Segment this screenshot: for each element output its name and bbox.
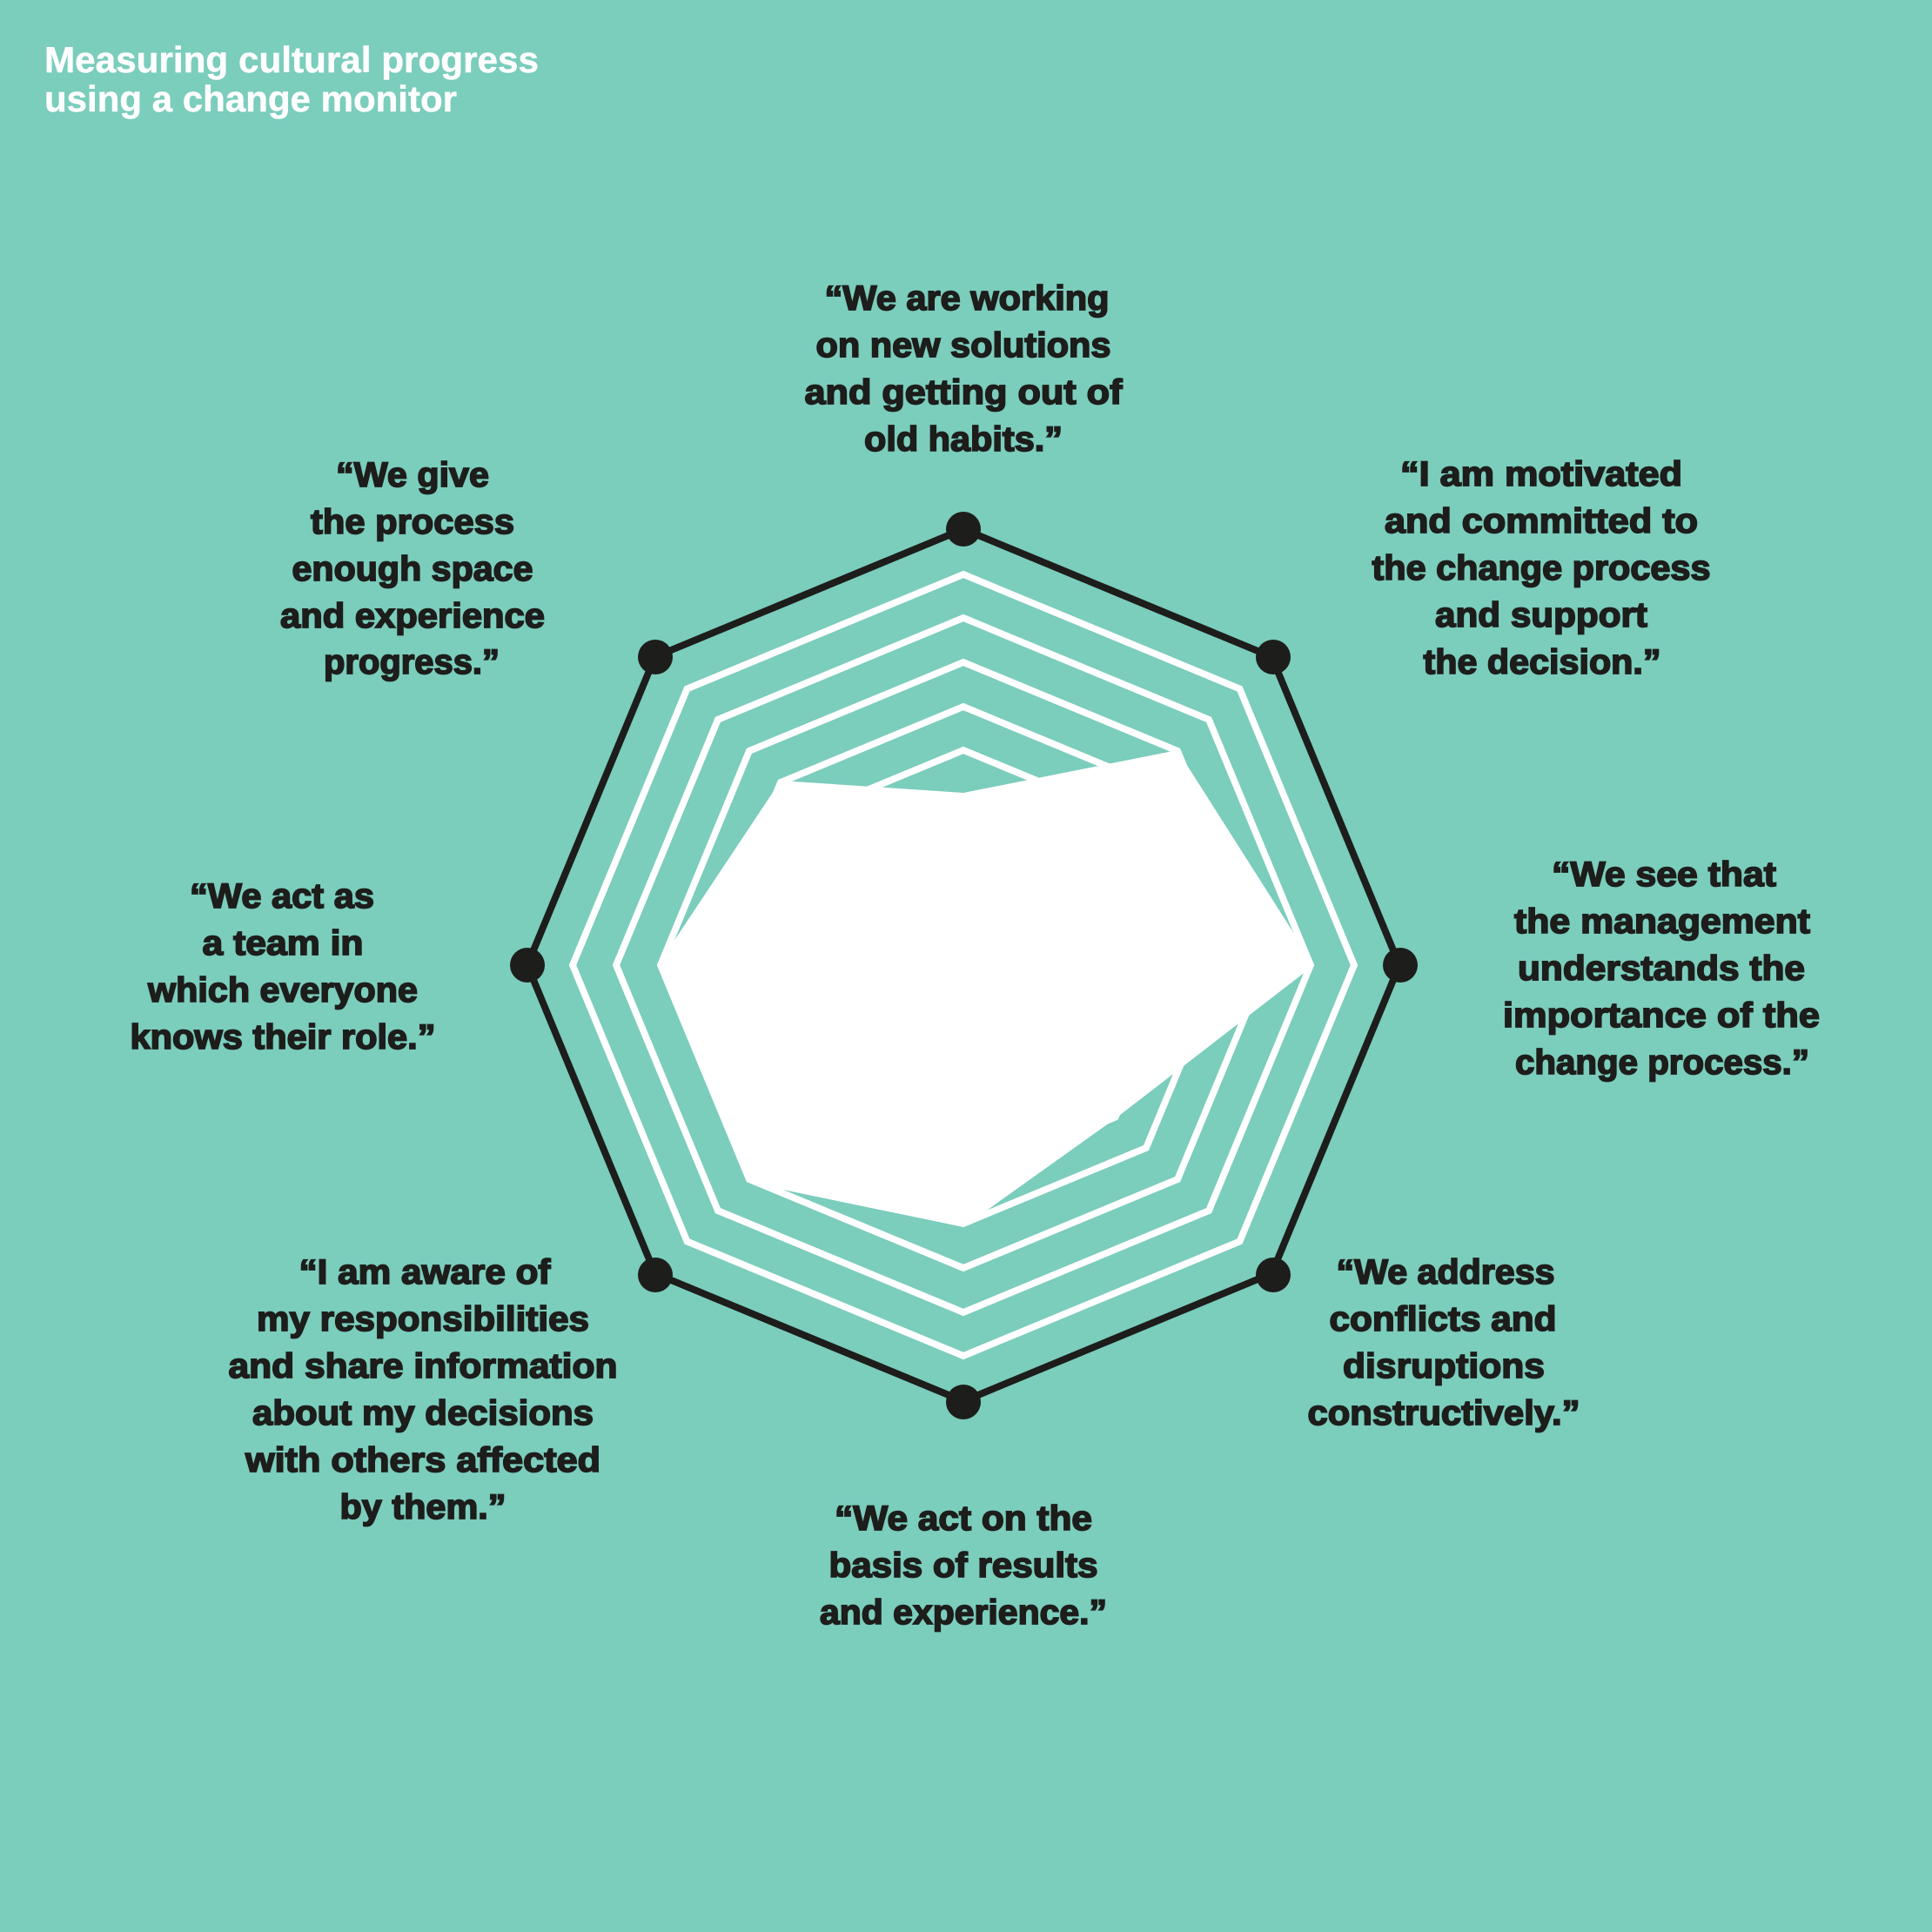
white data area <box>658 750 1314 1227</box>
label: right: importance of the <box>1503 996 1820 1035</box>
label: bottom left: about my decisions <box>252 1394 594 1432</box>
label: bottom: “We act on the <box>835 1499 1092 1538</box>
label: bottom right: constructively.” <box>1307 1394 1580 1432</box>
label: bottom left: by them.” <box>339 1488 506 1526</box>
label: bottom left: and share information <box>228 1347 618 1385</box>
label: top left <box>280 456 545 681</box>
label: top right: the decision.” <box>1424 643 1660 681</box>
label: top <box>804 279 1123 459</box>
label: bottom right: conflicts and <box>1330 1300 1556 1338</box>
label: top: old habits.” <box>864 420 1063 459</box>
label: top left: the process <box>311 503 514 541</box>
title <box>44 39 539 119</box>
label: bottom right <box>1307 1253 1580 1432</box>
label: top left: progress.” <box>324 643 500 681</box>
label: left: “We act as <box>190 877 374 916</box>
label: bottom <box>820 1499 1107 1632</box>
outer octagon axis <box>527 529 1399 1401</box>
label: top right <box>1372 455 1711 681</box>
label: top right: the change process <box>1372 549 1711 587</box>
label: top right: and committed to <box>1385 502 1698 540</box>
title: Measuring cultural progress <box>44 39 539 80</box>
label: bottom left <box>228 1253 618 1526</box>
label: left <box>131 877 436 1057</box>
label: top left: enough space <box>292 550 533 588</box>
label: left: which everyone <box>147 971 418 1010</box>
label: top: “We are working <box>825 279 1109 318</box>
label: left: a team in <box>202 924 364 963</box>
label: bottom right: disruptions <box>1343 1347 1545 1385</box>
label: bottom left: with others affected <box>245 1441 600 1479</box>
axis end dots <box>510 512 1418 1419</box>
label: bottom right: “We address <box>1337 1253 1554 1291</box>
label: bottom: basis of results <box>828 1546 1098 1585</box>
label: left: knows their role.” <box>131 1018 436 1057</box>
label: top right: and support <box>1435 596 1647 634</box>
title: using a change monitor <box>44 78 457 119</box>
label: top: and getting out of <box>804 373 1123 412</box>
label: bottom left: “I am aware of <box>299 1253 551 1291</box>
label: right: “We see that <box>1552 855 1776 894</box>
radar chart <box>510 512 1418 1419</box>
label: right: understands the <box>1518 949 1805 988</box>
label: right: change process.” <box>1515 1043 1809 1082</box>
label: top left: “We give <box>336 456 489 494</box>
scale rings <box>573 574 1354 1356</box>
label: bottom: and experience.” <box>820 1593 1107 1632</box>
label: top left: and experience <box>280 597 545 635</box>
label: right <box>1503 855 1820 1082</box>
label: top right: “I am motivated <box>1400 455 1682 493</box>
label: bottom left: my responsibilities <box>257 1300 589 1338</box>
label: right: the management <box>1514 902 1810 941</box>
label: top: on new solutions <box>816 326 1110 365</box>
